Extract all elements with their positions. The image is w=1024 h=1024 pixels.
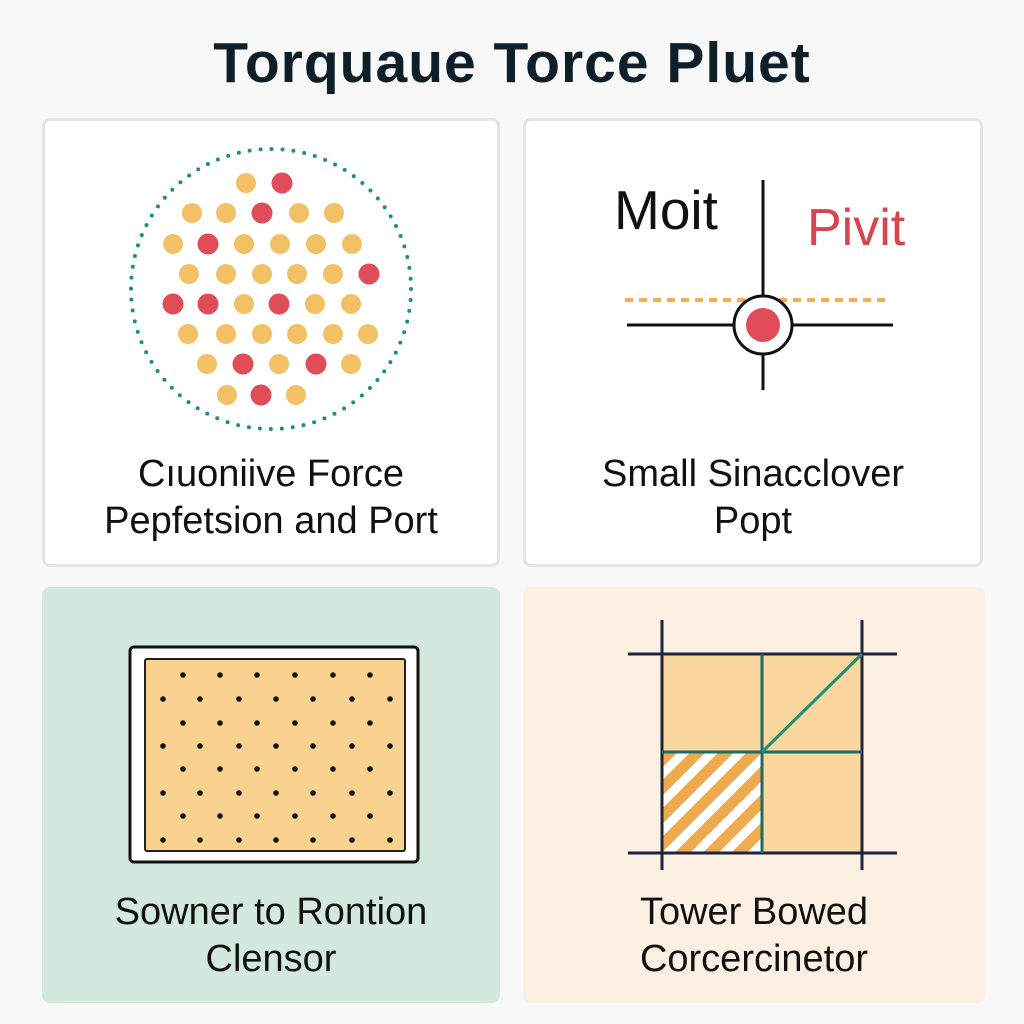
caption	[602, 453, 904, 542]
caption: Clensor	[206, 938, 336, 980]
caption: Sowner to Rontion	[115, 891, 427, 933]
diagram: pivot cross: Moit	[614, 179, 718, 241]
caption	[104, 453, 438, 542]
panel: grid squares	[523, 587, 985, 1003]
caption	[640, 891, 868, 980]
title: Torquaue Torce Pluet	[213, 31, 811, 95]
caption: Small Sinacclover	[602, 453, 904, 495]
caption: Cıuoniive Force	[138, 453, 404, 495]
caption	[115, 891, 427, 980]
caption: Tower Bowed	[640, 891, 868, 933]
panel: pivot	[523, 118, 983, 567]
panel: dot cluster	[42, 118, 500, 567]
panel: sensor grid	[42, 587, 500, 1003]
caption: Corcercinetor	[640, 938, 868, 980]
caption: Pepfetsion and Port	[104, 500, 438, 542]
caption: Popt	[714, 500, 792, 542]
diagram: pivot cross	[614, 179, 906, 390]
diagram: dotted plate	[128, 646, 420, 864]
diagram: pivot cross: Pivit	[807, 199, 906, 257]
chart: dot circle	[129, 147, 413, 431]
